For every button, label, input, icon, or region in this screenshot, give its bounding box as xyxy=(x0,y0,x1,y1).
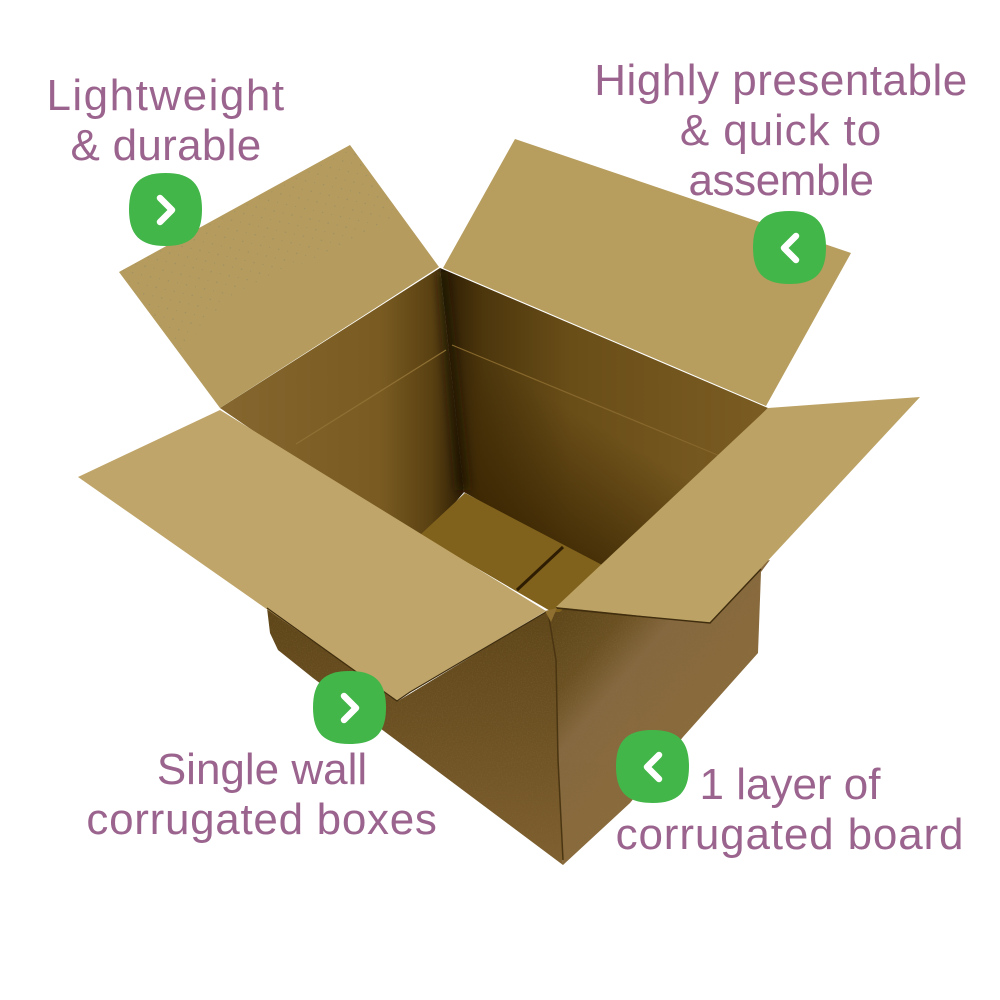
label: single wall corrugated boxes: Single wall xyxy=(157,745,367,794)
back-left flap xyxy=(119,145,439,408)
box floor xyxy=(420,493,606,612)
front-left flap xyxy=(78,410,546,701)
label: highly presentable: Highly presentable xyxy=(594,56,968,105)
label: lightweight and durable xyxy=(46,71,286,170)
right flap lower edge xyxy=(556,569,761,623)
inner fold line left xyxy=(296,350,446,444)
cardboard box illustration xyxy=(78,139,920,865)
corner tab xyxy=(545,608,557,622)
label: one layer of corrugated board xyxy=(616,760,964,859)
floor seam xyxy=(517,547,563,590)
inner fold line back xyxy=(452,345,720,456)
icon: green left chevron top right xyxy=(753,211,826,284)
label: single wall corrugated boxes xyxy=(86,745,438,844)
label: lightweight and durable: Lightweight xyxy=(46,71,286,120)
label: single wall corrugated boxes: corrugated boxes xyxy=(86,795,438,844)
label: highly presentable: assemble xyxy=(688,156,874,205)
label: highly presentable: & quick to xyxy=(680,106,882,155)
icon: green right chevron bottom left xyxy=(313,671,386,744)
icon: green right chevron top left xyxy=(129,173,202,246)
right flap xyxy=(556,397,920,623)
outer front-right wall xyxy=(553,560,770,865)
label: lightweight and durable: & durable xyxy=(70,121,262,170)
label: one layer of corrugated board: 1 layer of xyxy=(700,760,880,809)
inner back wall xyxy=(440,268,768,572)
outer front-left wall xyxy=(267,608,563,865)
icon: green left chevron bottom right xyxy=(616,730,689,803)
inner corner shadow xyxy=(439,272,468,490)
inner left wall xyxy=(220,268,464,545)
front-left flap edges xyxy=(267,608,546,701)
label: highly presentable xyxy=(594,56,968,205)
back-right flap xyxy=(443,139,851,406)
corner crease xyxy=(548,612,563,860)
label: one layer of corrugated board: corrugated board xyxy=(616,810,964,859)
